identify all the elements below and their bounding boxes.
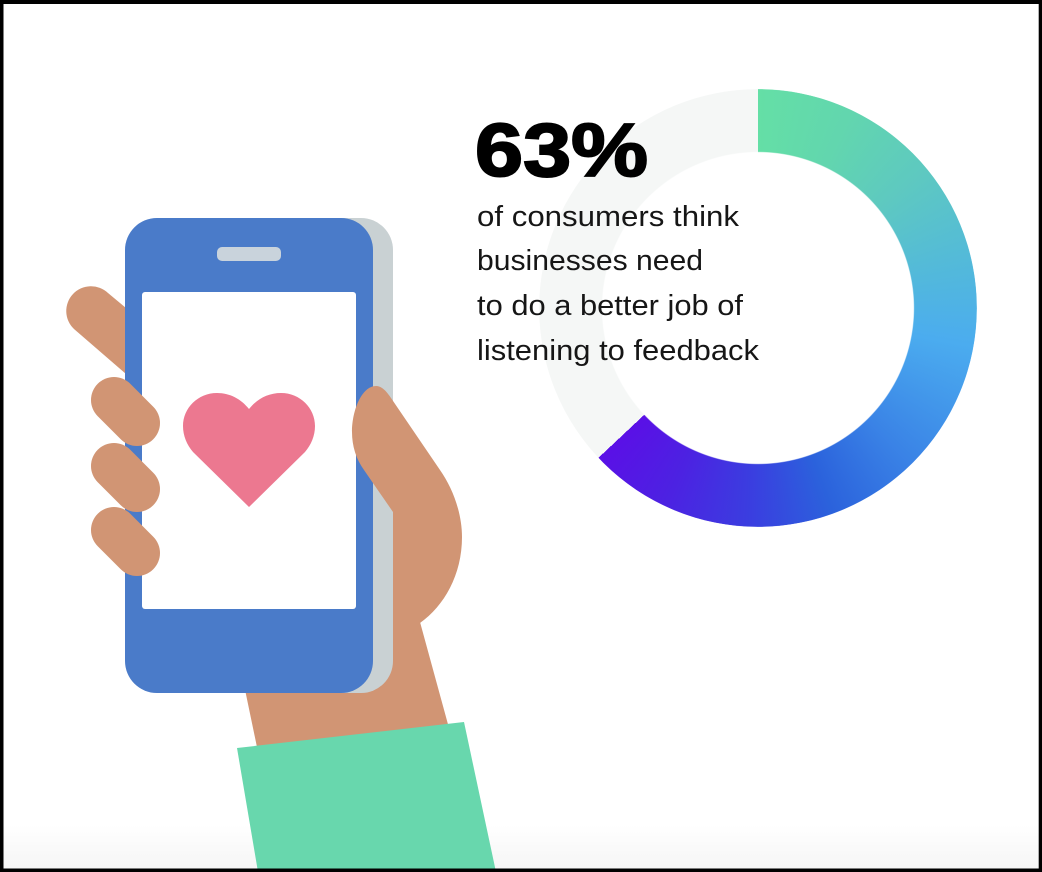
phone body [125, 218, 373, 693]
fingers [114, 400, 137, 553]
thumb and palm [352, 386, 462, 660]
illustration: hand holding phone [66, 218, 496, 872]
description text: of consumers think [477, 201, 740, 233]
description text: to do a better job of [477, 290, 744, 322]
forearm [243, 610, 449, 752]
phone screen [142, 292, 356, 609]
stat: 63%: 63% [475, 108, 648, 192]
phone speaker [217, 247, 281, 261]
donut chart: 63% [539, 89, 977, 527]
phone back shadow [175, 218, 393, 693]
description text: businesses need [477, 245, 703, 277]
description text [477, 201, 760, 367]
description text: listening to feedback [477, 335, 760, 367]
icon: heart [183, 393, 315, 507]
bottom fade [0, 825, 1042, 872]
top finger [66, 286, 126, 374]
sleeve [237, 722, 496, 872]
